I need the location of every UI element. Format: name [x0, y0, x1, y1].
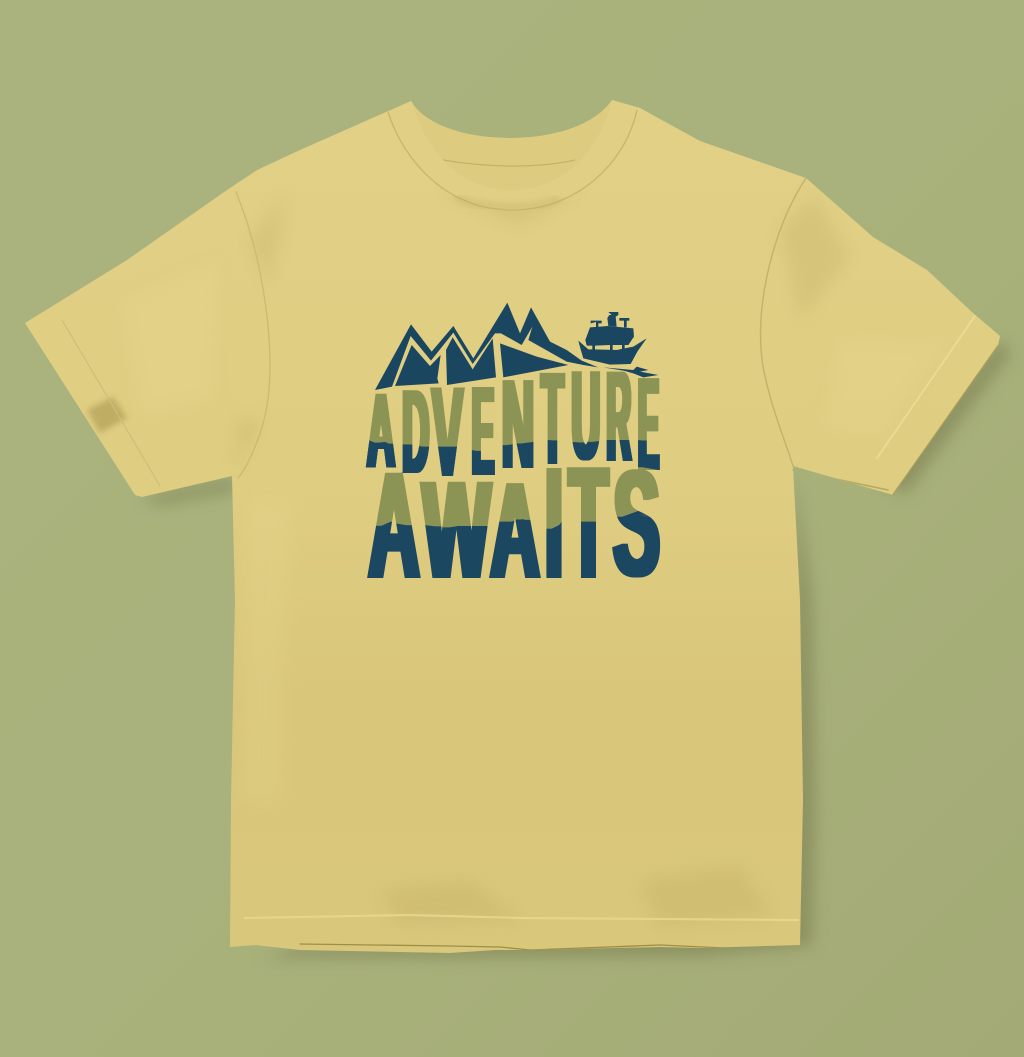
title: AWAITS [368, 435, 660, 611]
title: ADVENTURE: R [606, 346, 631, 488]
inner back neck [411, 100, 625, 190]
sea wave [603, 367, 658, 377]
title: ADVENTURE: E [472, 360, 494, 502]
shirt body and sleeves [25, 100, 1000, 953]
cabin [585, 326, 634, 350]
print: adventure awaits graphic [367, 303, 660, 611]
icon: mountains [375, 303, 598, 390]
collar rib [388, 100, 637, 210]
shirt shadow [140, 340, 1012, 960]
masts and flags [591, 312, 629, 327]
title: ADVENTURE: U [571, 345, 600, 486]
title: ADVENTURE [367, 344, 659, 502]
collar [388, 100, 637, 210]
title: ADVENTURE: N [502, 352, 534, 494]
title: ADVENTURE: D [402, 366, 429, 498]
sleeve seams [62, 178, 998, 950]
title: ADVENTURE: T [541, 344, 564, 492]
title: AWAITS: I [545, 436, 563, 611]
text: E [638, 350, 659, 498]
title: ADVENTURE: A [367, 372, 395, 490]
neck label stitch [443, 160, 575, 166]
text: S [613, 439, 660, 607]
title: AWAITS: A [368, 441, 420, 609]
title: AWAITS: T [569, 435, 608, 611]
dark cuff patch [87, 397, 127, 433]
title: AWAITS: A [490, 455, 540, 606]
t-shirt [25, 100, 1000, 953]
title: AWAITS: W [422, 454, 491, 607]
hull [578, 338, 647, 365]
icon: sailing ship [578, 312, 658, 377]
title: ADVENTURE: V [432, 360, 463, 502]
shirt shading [62, 178, 998, 950]
